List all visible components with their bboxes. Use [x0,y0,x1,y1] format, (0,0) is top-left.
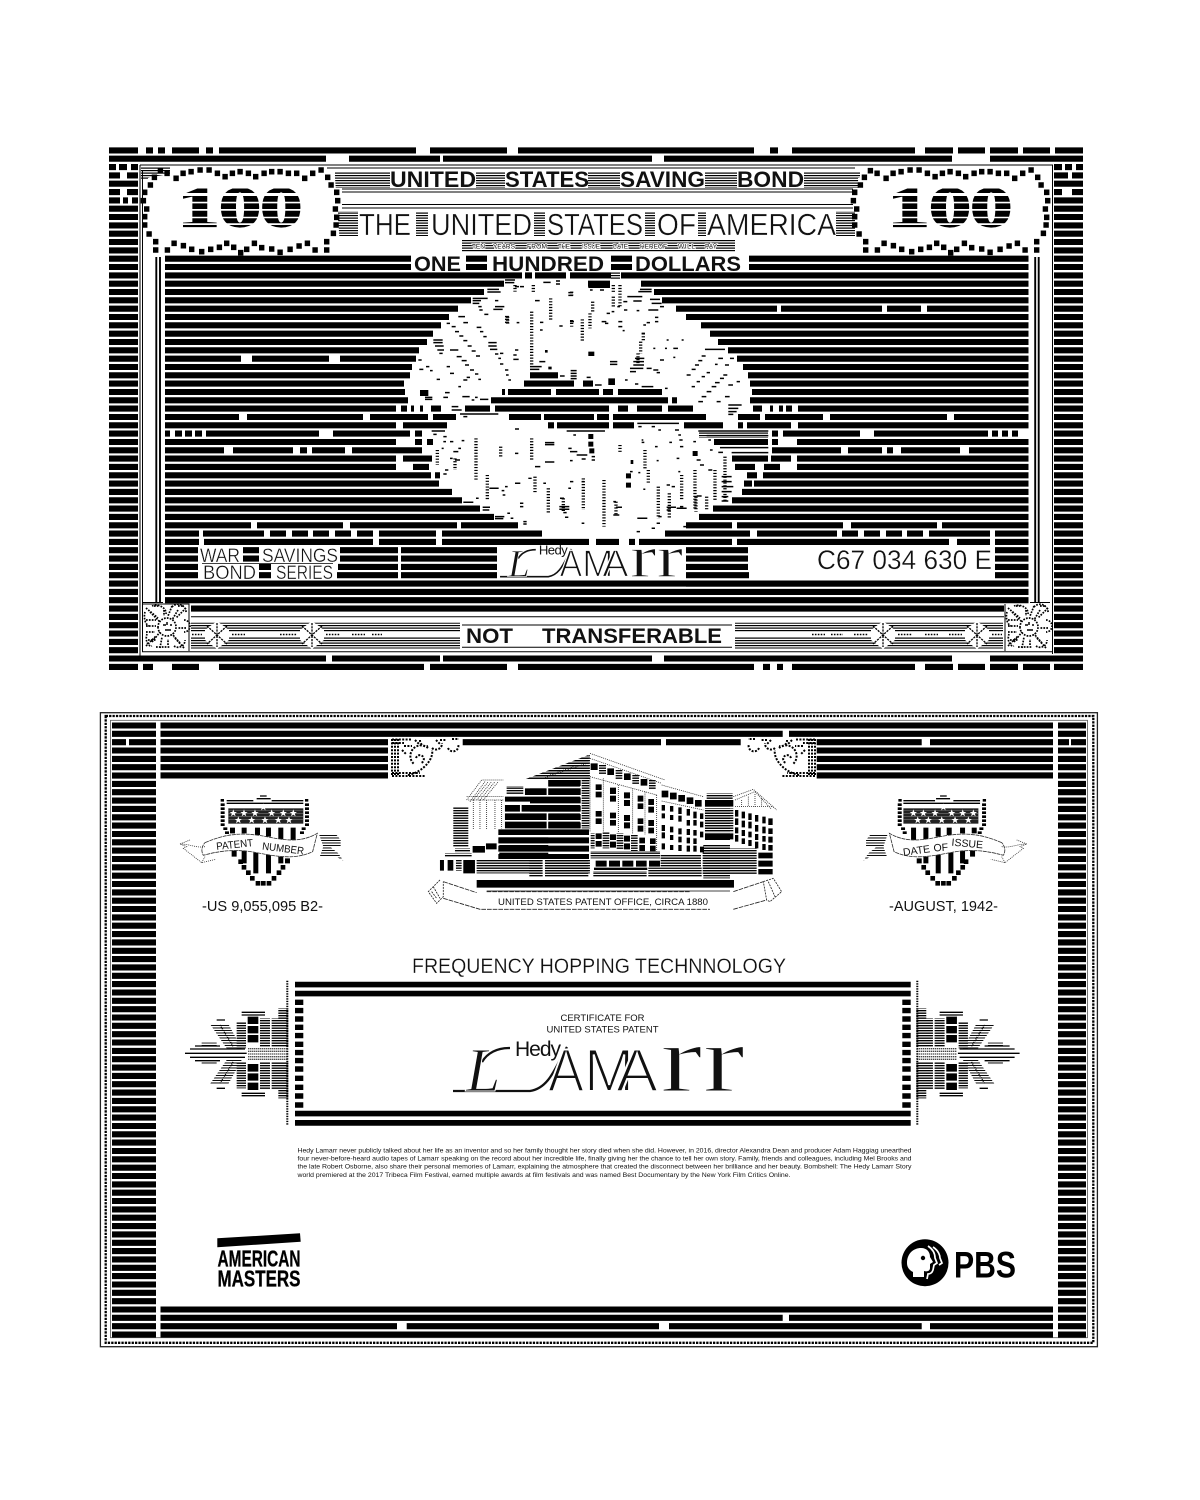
war savings bond series label: SERIES [276,563,333,584]
war savings bond series label: BOND [203,563,256,584]
not transferable: NOT [466,625,513,648]
dotted cornices and pilasters [543,753,703,852]
seal: date of issue: OF [933,842,948,855]
fine print: ten years from the issue date [472,244,718,250]
seal: date of issue: ISSUE [951,837,983,851]
logo: american masters: AMERICAN [218,1245,300,1271]
body paragraph: the late Robert Osborne, also share their personal memories of Lamarr, explaining the atmosphere that created the disconnect between her brilliance and her beauty. Bombshell: The Hedy Lamarr Story [298,1164,912,1171]
signature: hedy lamarr small: L [507,543,530,586]
heading: united states saving bond: UNITED [390,167,476,192]
fine print: ten years from the issue date: TEN [472,244,485,250]
certificate frame [287,981,917,1126]
war savings bond series label: WAR [200,546,240,567]
heading: the united states of america: STATES [547,207,643,242]
issue date value: -AUGUST, 1942- [889,898,998,915]
signature: hedy lamarr large: Hedy [515,1038,562,1061]
solid blocks [420,282,698,488]
fine print: ten years from the issue date: FROM [527,244,547,250]
heading: the united states of america [359,207,836,242]
heading: united states saving bond [390,167,804,192]
title: frequency hopping technology: FREQUENCY HOPPING TECHNNOLOGY [412,954,786,978]
star field [228,808,303,824]
bars under serial [686,581,1028,587]
serial number: C67 034 630 E [817,545,992,575]
vertical dash stacks [437,285,725,527]
inner engraved bars around the lips [165,259,1028,609]
building ribbon caption [428,878,782,909]
logo: pbs [902,1239,1016,1286]
signature: hedy lamarr small [500,524,683,590]
signature: hedy lamarr large: rr [660,1006,745,1112]
not transferable: TRANSFERABLE [542,625,722,648]
ground rule [487,889,730,892]
heading: the united states of america: OF [657,207,696,242]
logo: american masters [217,1233,301,1292]
fine print: ten years from the issue date: WILL [678,244,695,250]
striped banner wing [319,835,343,861]
fine print: ten years from the issue date: PAY [705,244,718,250]
signature: hedy lamarr large: A [548,1037,584,1104]
war savings bond series label: SAVINGS [262,546,338,567]
stars [230,803,297,823]
heading: united states saving bond: STATES [505,167,589,192]
certificate bars: columns and bands [112,726,1086,1334]
signature: hedy lamarr large: M [584,1037,634,1104]
war savings bond series label [200,546,338,584]
flourish: left [185,1008,288,1098]
signature: hedy lamarr small: rr [630,524,683,590]
seal: patent number: NUMBER [261,841,305,858]
heading: one hundred dollars: DOLLARS [635,253,741,276]
star ornaments [205,621,989,649]
flourish: right [916,1008,1020,1098]
seal: date of issue: DATE [902,843,931,859]
corner ornament: right [1006,604,1052,648]
signature: hedy lamarr large [453,1006,745,1112]
banner [202,833,317,857]
corner scroll ornament: left [392,739,459,776]
not transferable [466,625,722,648]
medallion: right 100 [851,169,1050,253]
frame lines and pillars [140,165,1053,660]
white box: serial number and signature clearing [497,546,995,580]
heading: united states saving bond: SAVING [620,167,705,192]
body paragraph: four never-before-heard audio tapes of Lamarr speaking on the record about her incredible life, finally giving her the chance to tell her own story. Family, friends and colleagues, including Mel Brooks and [298,1156,912,1162]
left wing and right pavilion, reference scale [440,755,590,873]
fine print: ten years from the issue date: HEREOF [640,244,667,250]
signature: hedy lamarr small: Hedy [539,543,568,558]
fine print: ten years from the issue date: DATE [613,244,629,250]
body paragraph: world premiered at the 2017 Tribeca Film Festival, earned multiple awards at film festivals and was named Best Documentary by the New York Film Critics Online. [296,1172,791,1179]
dotted rules in ornament bands [192,634,1002,636]
stripes right of lower lip [699,431,768,438]
dark wall bars [477,763,734,888]
patent number value: -US 9,055,095 B2- [202,898,323,915]
certificate heading: UNITED STATES PATENT [546,1025,659,1035]
corner scroll ornament: right [748,739,815,776]
100 numeral right: 100 [888,177,1012,239]
panel: patent certificate [100,713,1097,1347]
engraved stripe fields [141,167,1003,648]
shield edges and stripes [221,799,309,886]
seal: patent number: PATENT [216,837,254,853]
panel: saving bond [109,150,1083,667]
band clearing for the dotted ornaments [191,632,1003,637]
shield cap [227,796,303,803]
frame side squares [295,1002,911,1105]
roof stripes [523,755,730,878]
outer bars: top, bottom and side columns [109,150,1083,667]
body paragraph [296,1147,912,1179]
heading: the united states of america: THE [359,207,411,242]
seal: patent number [180,796,343,886]
banner tails [180,840,216,863]
scattered short dashes [418,280,768,532]
heading: the united states of america: UNITED [431,207,532,242]
certificate heading [546,1013,659,1035]
corner ornament: left [144,604,190,648]
heading: united states saving bond: BOND [737,167,804,192]
divider: war savings [202,563,333,565]
100 numeral: 100 [178,177,302,239]
building ribbon caption: UNITED STATES PATENT OFFICE, CIRCA 1880 [498,897,708,908]
pillars [156,257,1039,602]
certificate border [100,713,1097,1347]
dotted frame rules [287,981,917,1126]
fine print: ten years from the issue date: THE [558,244,571,250]
body paragraph: Hedy Lamarr never publicly talked about her life as an inventor and so her family thought her story died when she did. However, in 2016, director Alexandra Dean and producer Adam Haggiag unearthed [298,1147,912,1154]
engraving: united states patent office building [440,753,777,891]
fine print: ten years from the issue date: ISSUE [582,244,601,250]
heading: one hundred dollars: HUNDRED [492,253,604,276]
seal: date of issue [863,796,1027,886]
lips portrait [418,280,768,532]
signature: hedy lamarr small: A [560,543,583,585]
central block and right wing, reference scale [477,753,734,891]
field stripes [228,811,303,819]
logo: american masters: MASTERS [218,1266,300,1292]
signature: hedy lamarr large: L [465,1037,500,1105]
signature: hedy lamarr small: A [602,543,630,585]
heading: one hundred dollars [414,253,741,276]
fine print: ten years from the issue date: YEARS [493,244,516,250]
signature: hedy lamarr small: M [582,543,614,585]
certificate heading: CERTIFICATE FOR [560,1013,645,1023]
medallion: left 100 [141,169,340,253]
heading: one hundred dollars: ONE [414,253,461,276]
heading: the united states of america: AMERICA [707,207,836,242]
signature: hedy lamarr large: A [616,1037,658,1104]
logo: pbs: PBS [954,1243,1016,1285]
